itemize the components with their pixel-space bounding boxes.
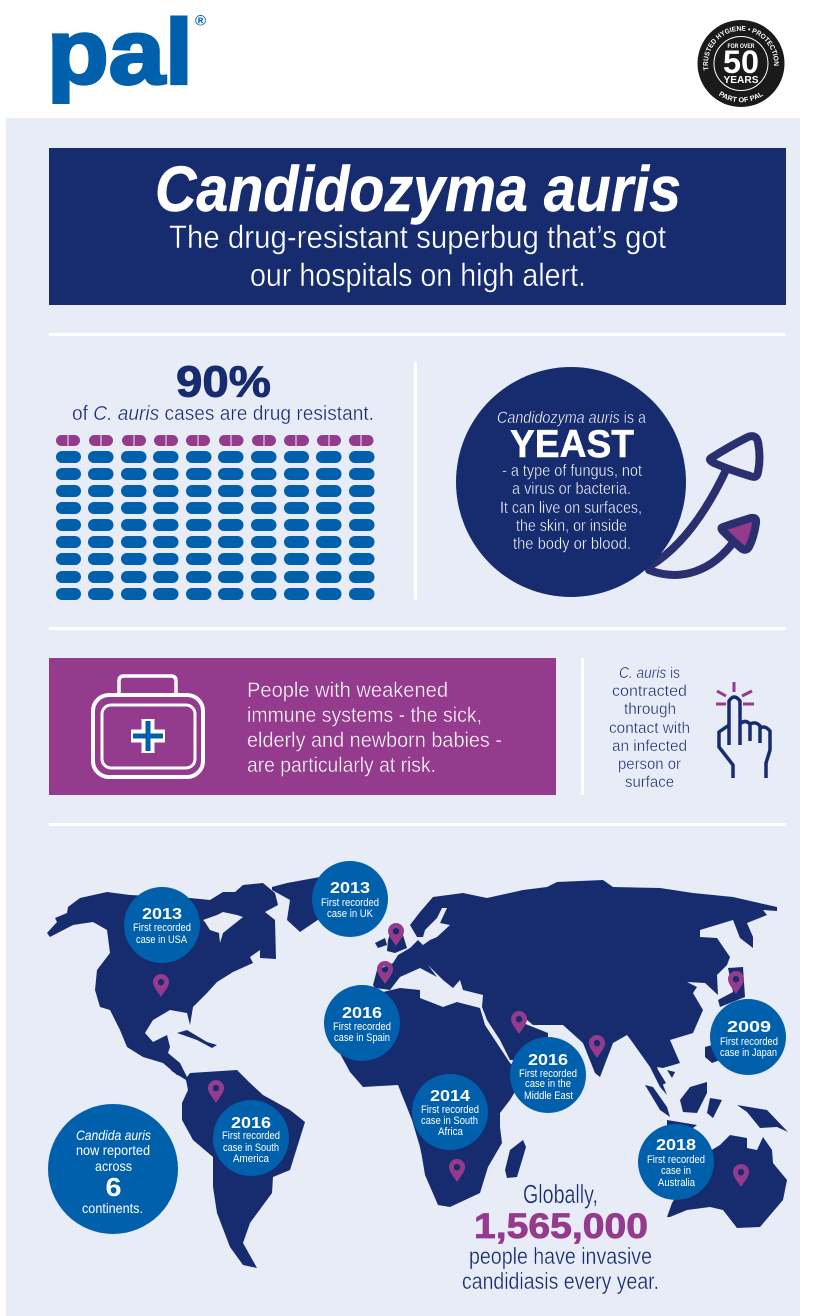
callout: South America 2016: 2016 bbox=[231, 1115, 271, 1132]
stat: 90% drug resistant: of C. auris cases are drug resistant. bbox=[72, 403, 374, 425]
panel: people at risk: immune systems - the sick, bbox=[247, 704, 482, 727]
callout: Australia 2018 bbox=[638, 1124, 714, 1200]
location pins bbox=[153, 923, 749, 1187]
yeast circle: YEAST bbox=[510, 423, 634, 466]
callout: Australia 2018: case in bbox=[661, 1165, 691, 1177]
callout: UK 2013: 2013 bbox=[330, 880, 370, 897]
stat: 1,565,000 people bbox=[462, 1179, 659, 1294]
callout: 6 continents: now reported bbox=[76, 1142, 150, 1158]
callout: Middle East 2016 bbox=[510, 1037, 586, 1113]
pill chart: 10 of 100 purple bbox=[56, 435, 374, 600]
yeast circle bbox=[456, 367, 686, 597]
callout: Japan 2009 bbox=[710, 999, 786, 1075]
text: how C. auris is contracted: contracted bbox=[612, 683, 687, 700]
callout: 6 continents: 6 bbox=[106, 1172, 122, 1202]
callout: USA 2013: 2013 bbox=[142, 906, 182, 923]
badge: 50 years: 50 bbox=[723, 44, 759, 80]
callout: Australia 2018: Australia bbox=[658, 1177, 696, 1189]
subtitle: The drug-resistant superbug that’s got bbox=[169, 219, 666, 255]
callout: UK 2013: First recorded bbox=[321, 897, 379, 909]
yeast circle: the skin, or inside bbox=[516, 516, 627, 535]
callout: South America 2016: case in South bbox=[223, 1142, 279, 1154]
callout: 6 continents bbox=[48, 1104, 178, 1234]
panel: people at risk: elderly and newborn babies - bbox=[247, 729, 502, 752]
world map bbox=[47, 877, 788, 1268]
callout: USA 2013 bbox=[124, 887, 200, 963]
yeast circle: Candidozyma auris is a bbox=[497, 408, 646, 427]
callout: South Africa 2014: Africa bbox=[438, 1126, 464, 1138]
callout: Australia 2018: First recorded bbox=[647, 1154, 705, 1166]
yeast circle: the body or blood. bbox=[513, 534, 631, 553]
callout: South Africa 2014 bbox=[412, 1074, 488, 1150]
yeast circle: - a type of fungus, not bbox=[502, 461, 642, 480]
panel: people at risk: People with weakened bbox=[247, 679, 448, 702]
text: how C. auris is contracted bbox=[609, 665, 690, 791]
callout: Spain 2016: 2016 bbox=[342, 1005, 382, 1022]
callout: Middle East 2016: Middle East bbox=[524, 1090, 573, 1102]
stat: 1,565,000 people: 1,565,000 bbox=[474, 1207, 648, 1246]
callout: Spain 2016: First recorded bbox=[333, 1021, 391, 1033]
callout: Spain 2016 bbox=[324, 985, 400, 1061]
text: how C. auris is contracted: person or bbox=[618, 756, 682, 773]
badge: 50 years bbox=[698, 20, 784, 107]
callout: 6 continents: across bbox=[95, 1158, 132, 1174]
callout: South Africa 2014: 2014 bbox=[430, 1088, 470, 1105]
callout: South Africa 2014: First recorded bbox=[421, 1104, 479, 1116]
text: how C. auris is contracted: surface bbox=[625, 774, 674, 791]
callout: Japan 2009: 2009 bbox=[727, 1019, 771, 1036]
callout: USA 2013: case in USA bbox=[136, 934, 188, 946]
icon: pointing hand bbox=[716, 682, 770, 778]
panel: people at risk: are particularly at risk. bbox=[247, 754, 436, 777]
logo: pal: ® bbox=[195, 12, 206, 30]
logo: pal: pal bbox=[47, 2, 193, 104]
icon: medical kit bbox=[93, 676, 203, 777]
panel: people at risk bbox=[49, 658, 556, 795]
callout: South America 2016 bbox=[213, 1100, 289, 1176]
title banner bbox=[49, 148, 786, 305]
callout: Japan 2009: case in Japan bbox=[720, 1047, 777, 1059]
subtitle bbox=[169, 219, 666, 293]
callout: 6 continents: Candida auris bbox=[76, 1127, 151, 1143]
stat: 1,565,000 people: candidiasis every year. bbox=[462, 1268, 659, 1294]
callout: Middle East 2016: case in the bbox=[525, 1078, 571, 1090]
text: how C. auris is contracted: through bbox=[624, 701, 676, 718]
stat: 1,565,000 people: Globally, bbox=[523, 1179, 598, 1209]
callout: South Africa 2014: case in South bbox=[421, 1115, 478, 1127]
text: how C. auris is contracted: C. auris is bbox=[619, 665, 680, 682]
subtitle: our hospitals on high alert. bbox=[250, 257, 586, 293]
callout: Spain 2016: case in Spain bbox=[334, 1032, 390, 1044]
callout: Middle East 2016: First recorded bbox=[519, 1068, 577, 1080]
badge: 50 years: YEARS bbox=[724, 75, 759, 86]
title: Candidozyma auris bbox=[155, 153, 681, 225]
text: how C. auris is contracted: contact with bbox=[609, 720, 690, 737]
callout: USA 2013: First recorded bbox=[133, 922, 191, 934]
stat: 90% drug resistant: 90% bbox=[176, 358, 271, 406]
text: how C. auris is contracted: an infected bbox=[612, 738, 687, 755]
yeast circle: a virus or bacteria. bbox=[512, 479, 631, 498]
callout: UK 2013: case in UK bbox=[327, 908, 374, 920]
callout: Japan 2009: First recorded bbox=[720, 1036, 778, 1048]
badge: 50 years: TRUSTED HYGIENE • PROTECTION bbox=[703, 26, 779, 71]
callout: Australia 2018: 2018 bbox=[656, 1137, 696, 1154]
icon: yeast mushrooms bbox=[649, 436, 760, 575]
callout: Middle East 2016: 2016 bbox=[528, 1052, 568, 1069]
stat: 1,565,000 people: people have invasive bbox=[469, 1243, 652, 1269]
callout: South America 2016: First recorded bbox=[222, 1130, 280, 1142]
badge: 50 years: FOR OVER bbox=[728, 44, 755, 50]
yeast circle: It can live on surfaces, bbox=[500, 498, 642, 517]
callout: UK 2013 bbox=[312, 861, 388, 937]
badge: 50 years: PART OF PAL bbox=[718, 91, 764, 102]
callout: South America 2016: America bbox=[233, 1153, 270, 1165]
callout: 6 continents: continents. bbox=[82, 1200, 143, 1216]
stat: 90% drug resistant bbox=[72, 358, 374, 425]
